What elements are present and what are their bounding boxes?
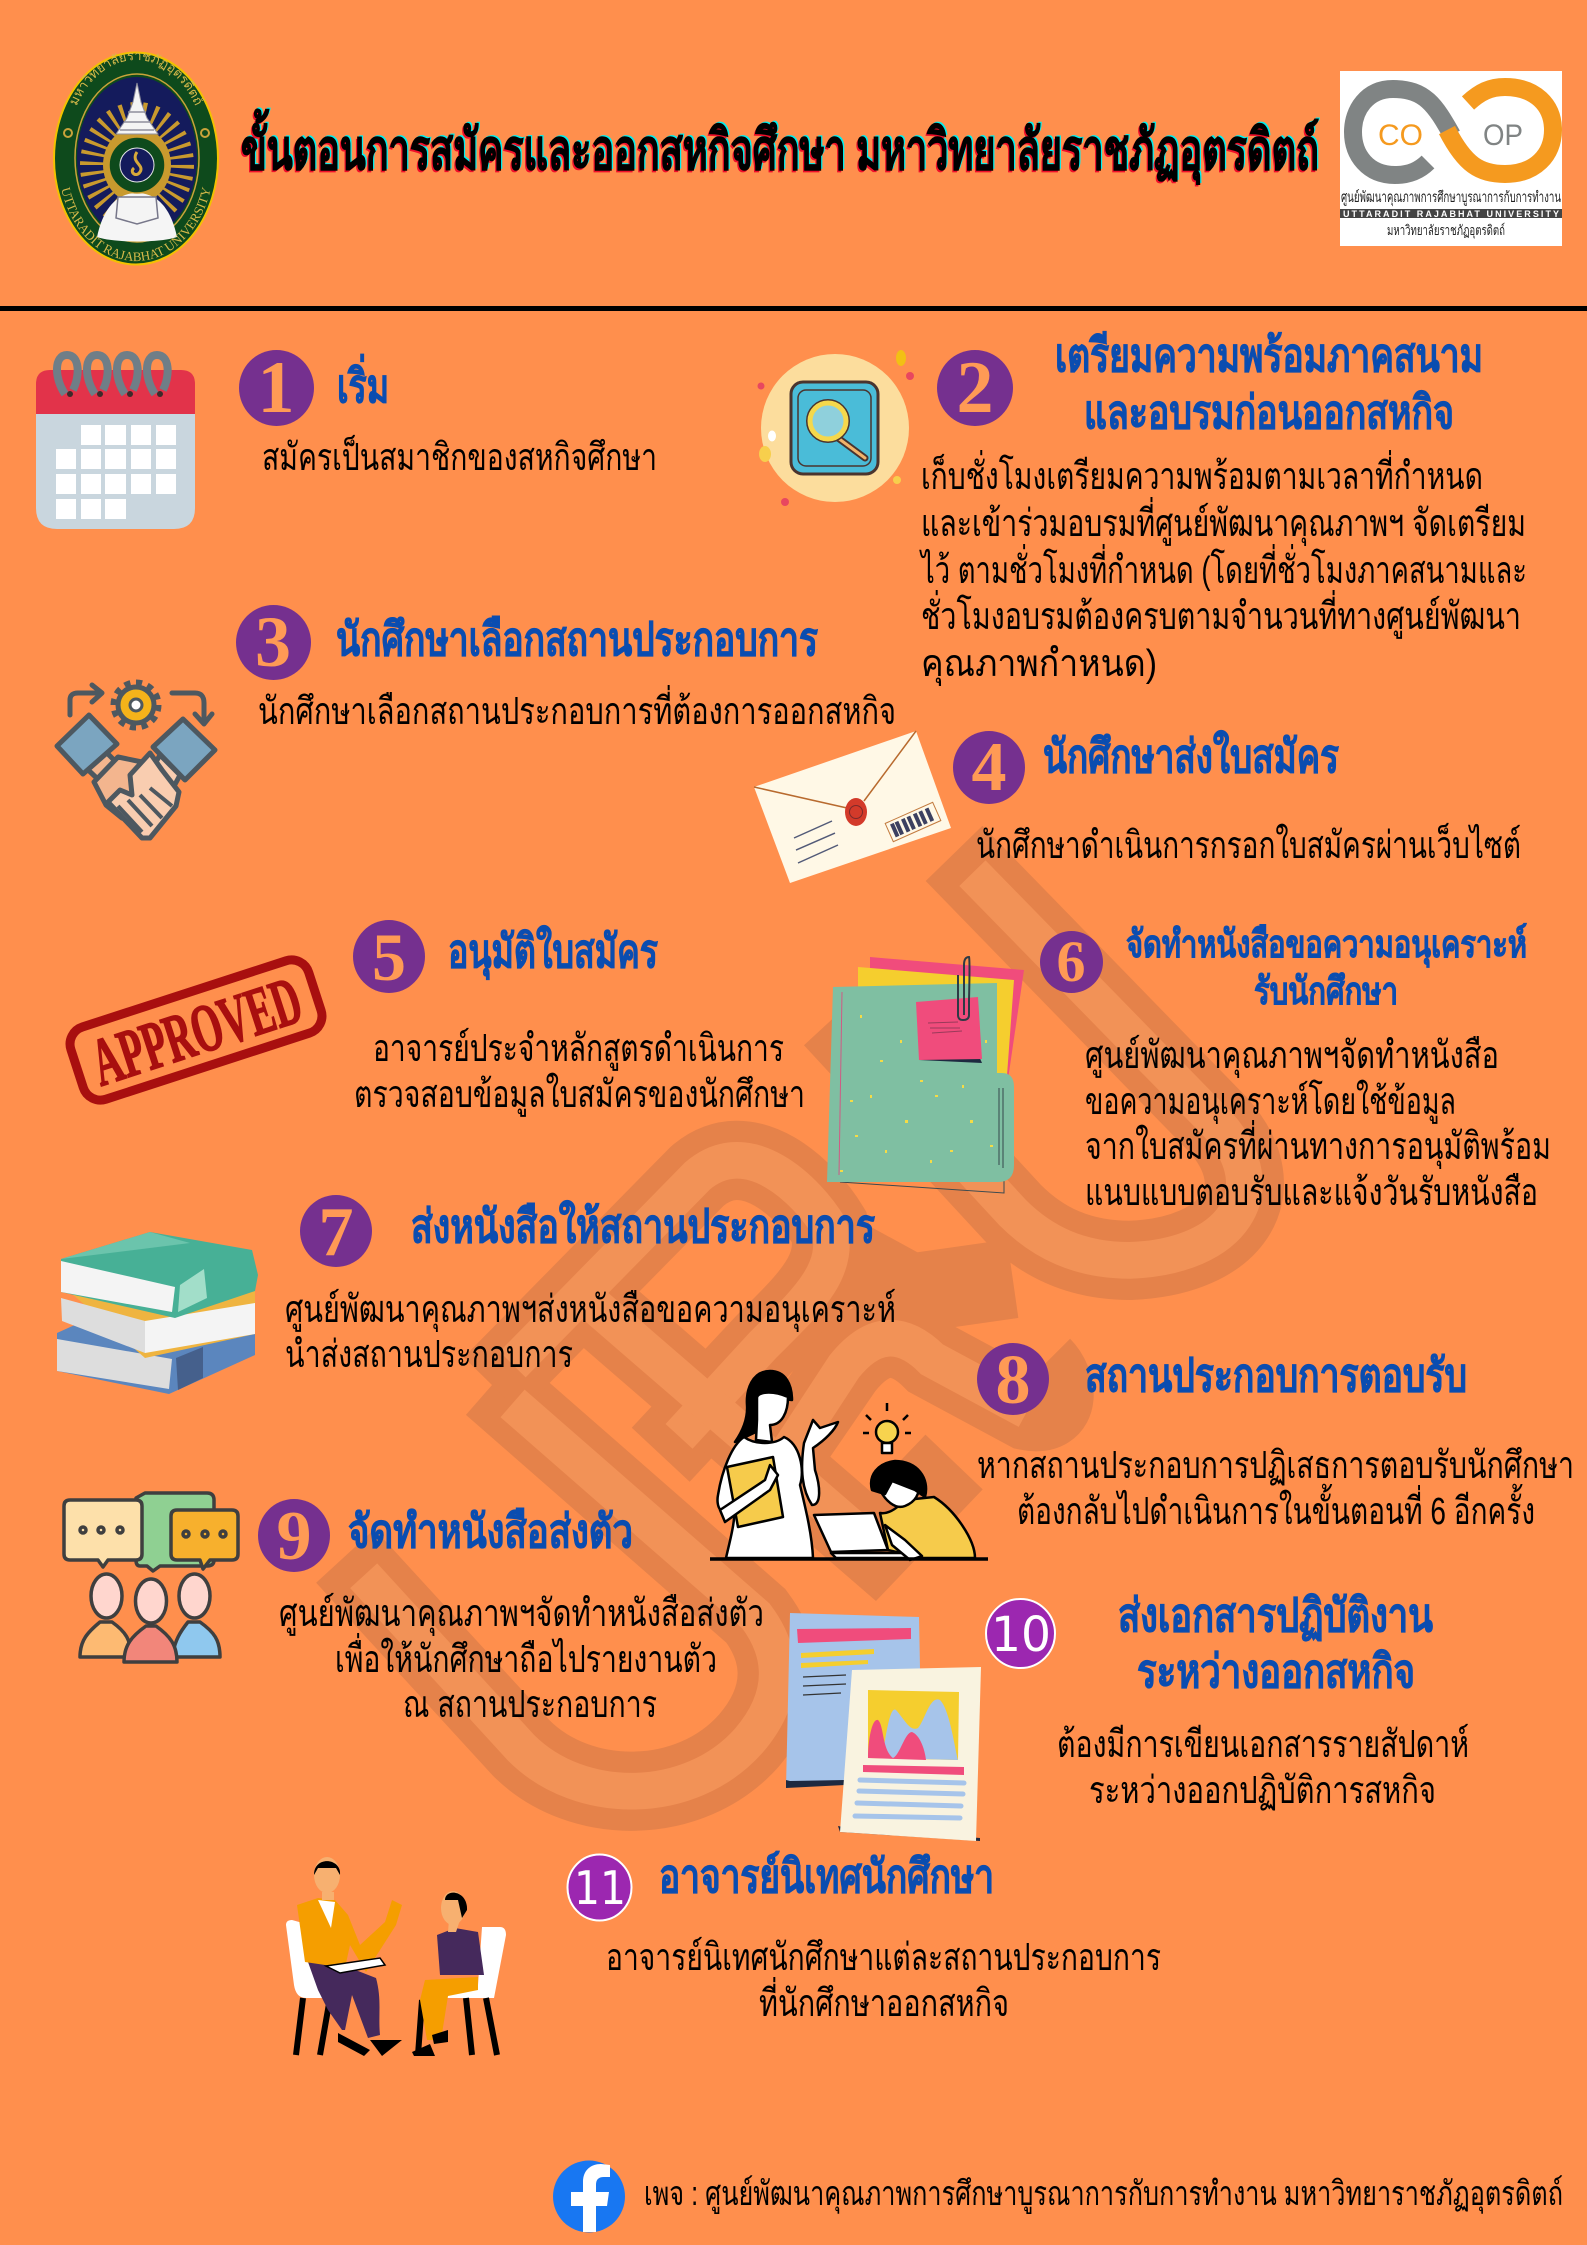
step 10: ระหว่างออกปฏิบัติการสหกิจ <box>1089 1770 1436 1812</box>
step 1: เริ่ม <box>337 354 389 412</box>
stamp: approved <box>65 955 327 1106</box>
logo: CO-OP center: OP <box>1483 119 1523 152</box>
illustration: woman teaching and student on laptop <box>710 1371 988 1560</box>
step 5: ตรวจสอบข้อมูลใบสมัครของนักศึกษา <box>354 1073 805 1117</box>
step 4: 4 <box>972 729 1006 806</box>
step 5: อนุมัติใบสมัคร <box>448 924 658 980</box>
logo: Uttaradit Rajabhat University seal: UTTARADIT RAJABHAT UNIVERSITY <box>62 186 210 262</box>
step 5: อาจารย์ประจำหลักสูตรดำเนินการ <box>373 1027 784 1071</box>
step 11: ที่นักศึกษาออกสหกิจ <box>759 1977 1009 2025</box>
step 4: นักศึกษาส่งใบสมัคร <box>1043 729 1339 782</box>
icon: documents with chart <box>786 1613 981 1841</box>
step 10: 10 <box>991 1607 1051 1663</box>
step 3 <box>236 602 896 733</box>
step 11 <box>568 1850 1161 2025</box>
step 7: 7 <box>318 1194 354 1271</box>
step 10 <box>986 1589 1469 1812</box>
title <box>240 108 1320 187</box>
step 9: ศูนย์พัฒนาคุณภาพฯจัดทำหนังสือส่งตัว <box>279 1592 764 1636</box>
step 3: นักศึกษาเลือกสถานประกอบการ <box>336 613 818 665</box>
step 6: 6 <box>1056 929 1086 994</box>
logo: CO-OP center: CO <box>1378 119 1423 152</box>
step 1: 1 <box>258 347 294 429</box>
step 3: 3 <box>255 602 291 682</box>
logo: CO-OP center: มหาวิทยาลัยราชภัฏอุตรดิตถ์ <box>1387 222 1505 239</box>
icon: folder with note <box>827 957 1024 1193</box>
logo: Uttaradit Rajabhat University seal: มหาวิทยาลัยราชภัฏอุตรดิตถ์ <box>70 52 206 106</box>
step 11: อาจารย์นิเทศนักศึกษาแต่ละสถานประกอบการ <box>606 1936 1161 1979</box>
step 7: ส่งหนังสือให้สถานประกอบการ <box>411 1199 875 1252</box>
step 2: 2 <box>956 347 994 429</box>
step 1 <box>239 347 657 479</box>
step 9: 9 <box>276 1498 312 1575</box>
icon: calendar <box>36 355 195 529</box>
step 2: คุณภาพกำหนด) <box>921 643 1157 686</box>
step 8 <box>977 1342 1574 1533</box>
step 7 <box>285 1194 896 1376</box>
step 10: ระหว่างออกสหกิจ <box>1137 1645 1415 1697</box>
step 9 <box>258 1498 764 1726</box>
step 7: นำส่งสถานประกอบการ <box>285 1334 573 1376</box>
step 6 <box>1040 923 1551 1214</box>
step 2 <box>919 329 1527 686</box>
step 3: นักศึกษาเลือกสถานประกอบการที่ต้องการออกสหกิจ <box>258 685 896 733</box>
step 5 <box>353 919 805 1117</box>
step 11: 11 <box>574 1861 626 1915</box>
stamp: approved: APPROVED <box>82 961 311 1100</box>
step 9: เพื่อให้นักศึกษาถือไปรายงานตัว <box>335 1633 717 1681</box>
step 6: รับนักศึกษา <box>1254 971 1398 1013</box>
step 9: ณ สถานประกอบการ <box>403 1684 657 1726</box>
header divider <box>0 306 1587 311</box>
illustration: advisor talking with student <box>286 1857 506 2056</box>
step 7: ศูนย์พัฒนาคุณภาพฯส่งหนังสือขอความอนุเคราะห์ <box>285 1288 896 1332</box>
icon: books <box>57 1232 258 1394</box>
icon: envelope <box>754 731 951 883</box>
logo: Uttaradit Rajabhat University seal <box>53 52 219 266</box>
step 11: อาจารย์นิเทศนักศึกษา <box>659 1850 994 1902</box>
step 10: ส่งเอกสารปฏิบัติงาน <box>1118 1589 1433 1641</box>
icon: handshake with gear <box>57 683 215 838</box>
step 4 <box>953 729 1521 867</box>
icon: magnifier card <box>758 350 914 506</box>
icon: three people with speech bubbles <box>64 1493 238 1662</box>
step 9: จัดทำหนังสือส่งตัว <box>348 1505 633 1557</box>
footer: facebook page <box>553 2160 1563 2232</box>
step 8: 8 <box>996 1342 1030 1419</box>
step 8: สถานประกอบการตอบรับ <box>1085 1349 1467 1401</box>
step 5: 5 <box>372 919 406 995</box>
step 1: สมัครเป็นสมาชิกของสหกิจศึกษา <box>262 434 657 479</box>
logo: CO-OP center <box>1340 71 1562 246</box>
logo: CO-OP center: UTTARADIT RAJABHAT UNIVERSITY <box>1343 209 1559 219</box>
step 2: และอบรมก่อนออกสหกิจ <box>1084 386 1454 438</box>
